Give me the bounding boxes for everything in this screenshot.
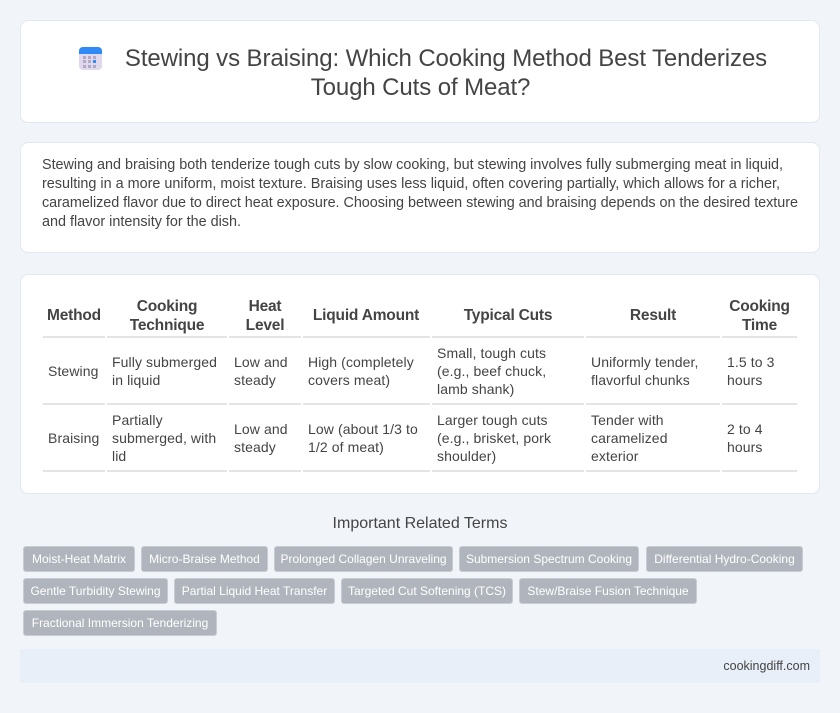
table headers: Braising <box>48 430 99 446</box>
table headers: flavorful chunks <box>591 372 690 388</box>
table headers: Partially <box>112 412 163 428</box>
table headers: steady <box>234 372 276 388</box>
table headers: Liquid Amount <box>313 307 419 324</box>
related term tags: Stew/Braise Fusion Technique <box>527 584 689 598</box>
related term tags: Differential Hydro-Cooking <box>654 552 795 566</box>
table headers: caramelized <box>591 430 668 446</box>
title <box>125 45 767 101</box>
table headers: Stewing <box>48 363 99 379</box>
footer source: cookingdiff.com <box>723 659 810 673</box>
intro text: caramelized flavor due to direct heat exposure. Choosing between stewing and braising depends on the desired texture <box>42 195 798 211</box>
table headers: lid <box>112 448 126 464</box>
table headers: Cooking <box>729 298 790 315</box>
related term tags: Partial Liquid Heat Transfer <box>182 584 327 598</box>
table headers: exterior <box>591 448 638 464</box>
table headers: Result <box>630 307 676 324</box>
related term tags: Submersion Spectrum Cooking <box>466 552 632 566</box>
intro text: resulting in a more uniform, moist texture. Braising uses less liquid, often covering partially, which allows for a richer, <box>42 176 780 192</box>
table headers: Low and <box>234 421 288 437</box>
table headers: Uniformly tender, <box>591 354 699 370</box>
table headers: Technique <box>130 317 204 334</box>
related term tags: Moist-Heat Matrix <box>32 552 126 566</box>
table headers: Tender with <box>591 412 664 428</box>
table headers: lamb shank) <box>437 381 514 397</box>
related term tags <box>23 546 803 636</box>
table headers: Method <box>47 307 101 324</box>
footer <box>20 649 820 683</box>
table headers: in liquid <box>112 372 160 388</box>
panel: description <box>20 142 820 253</box>
table headers: submerged, with <box>112 430 216 446</box>
panel: header <box>20 20 820 123</box>
intro text <box>42 157 798 230</box>
table headers: covers meat) <box>308 372 390 388</box>
table headers: Low (about 1/3 to <box>308 421 418 437</box>
table headers: (e.g., brisket, pork <box>437 430 551 446</box>
table headers: (e.g., beef chuck, <box>437 363 546 379</box>
table headers: High (completely <box>308 354 414 370</box>
title: Tough Cuts of Meat? <box>311 74 530 101</box>
intro text: and flavor intensity for the dish. <box>42 214 241 230</box>
panel: comparison table <box>20 274 820 494</box>
table headers: Larger tough cuts <box>437 412 548 428</box>
table headers: steady <box>234 439 276 455</box>
related term tags: Prolonged Collagen Unraveling <box>280 552 447 566</box>
related term tags: Targeted Cut Softening (TCS) <box>348 584 506 598</box>
icon: calendar <box>79 47 102 70</box>
table headers: Small, tough cuts <box>437 345 546 361</box>
title: Stewing vs Braising: Which Cooking Method Best Tenderizes <box>125 45 767 72</box>
table headers: 2 to 4 <box>727 421 763 437</box>
table headers: hours <box>727 439 763 455</box>
table headers: Typical Cuts <box>464 307 552 324</box>
table headers: Low and <box>234 354 288 370</box>
table headers: 1/2 of meat) <box>308 439 384 455</box>
table headers: shoulder) <box>437 448 496 464</box>
related term tags: Gentle Turbidity Stewing <box>30 584 161 598</box>
intro text: Stewing and braising both tenderize tough cuts by slow cooking, but stewing involves fully submerging meat in liquid, <box>42 157 783 173</box>
table headers: 1.5 to 3 <box>727 354 775 370</box>
table headers: Heat <box>249 298 281 315</box>
table headers: Time <box>742 317 777 334</box>
table headers: Cooking <box>137 298 197 315</box>
table headers: Level <box>246 317 284 334</box>
table headers: Fully submerged <box>112 354 217 370</box>
related term tags: Micro-Braise Method <box>149 552 260 566</box>
related term tags: Fractional Immersion Tenderizing <box>32 616 208 630</box>
table headers: hours <box>727 372 763 388</box>
related terms heading: Important Related Terms <box>333 515 507 532</box>
